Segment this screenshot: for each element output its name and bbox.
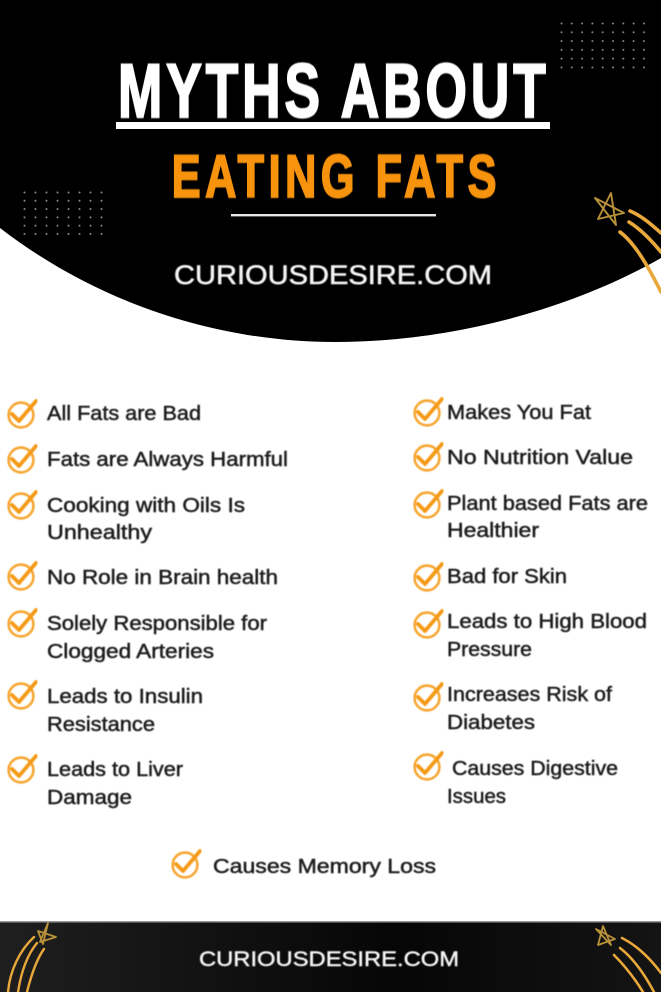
myth item: Issues	[447, 785, 506, 808]
myth item: Makes You Fat	[447, 401, 591, 424]
dot pattern: top right	[560, 22, 646, 69]
panel: footer bar	[0, 921, 661, 992]
myth item: Cooking with Oils Is	[47, 494, 245, 517]
myth item	[9, 563, 278, 589]
myth item: Leads to Insulin	[47, 685, 203, 708]
myth item	[415, 399, 591, 425]
myth item: Damage	[47, 786, 132, 809]
myth item: Leads to Liver	[47, 758, 183, 781]
footer website: CURIOUSDESIRE.COM	[199, 948, 459, 971]
myth item: Unhealthy	[47, 521, 153, 544]
subtitle: eating fats: EATING FATS	[172, 144, 496, 211]
divider line	[231, 214, 436, 216]
myth item	[415, 753, 618, 808]
myth item	[9, 446, 288, 472]
list: left column	[9, 401, 288, 809]
myth item: centered bottom	[173, 851, 436, 878]
myth item: Clogged Arteries	[47, 640, 214, 663]
myth item: All Fats are Bad	[47, 402, 201, 425]
myth item	[9, 401, 201, 427]
myth item	[415, 683, 612, 734]
dot pattern: left	[23, 191, 103, 236]
myth item: Leads to High Blood	[447, 610, 647, 633]
icon: shooting star footer left	[8, 923, 56, 992]
myth item	[9, 610, 267, 663]
myth item: centered bottom: Causes Memory Loss	[213, 855, 436, 878]
panel: black curved header	[0, 0, 661, 342]
myth item: No Role in Brain health	[47, 566, 278, 589]
myth item: Bad for Skin	[447, 565, 567, 588]
myth item	[9, 756, 183, 809]
myth item: Healthier	[447, 519, 539, 542]
myth item: Diabetes	[447, 711, 535, 734]
header website: CURIOUSDESIRE.COM	[174, 260, 492, 290]
myth item: Solely Responsible for	[47, 612, 267, 635]
myth item: Causes Digestive	[452, 757, 618, 780]
icon: shooting star top right	[595, 193, 661, 292]
myth item: Plant based Fats are	[447, 492, 648, 515]
myth item	[415, 610, 647, 661]
myth item	[415, 564, 567, 590]
icon: shooting star footer right	[596, 926, 661, 992]
title: myths about: MYTHS ABOUT	[118, 49, 546, 133]
myth item	[415, 491, 648, 542]
myth item: Fats are Always Harmful	[47, 448, 288, 471]
myth item: Pressure	[447, 638, 532, 661]
myth item	[9, 682, 203, 736]
myth item: Increases Risk of	[447, 683, 612, 706]
myth item: Resistance	[47, 713, 155, 736]
myth item	[415, 444, 633, 470]
list: right column	[415, 399, 648, 808]
myth item: No Nutrition Value	[447, 446, 633, 469]
title underline	[116, 122, 550, 129]
myth item	[9, 492, 245, 544]
